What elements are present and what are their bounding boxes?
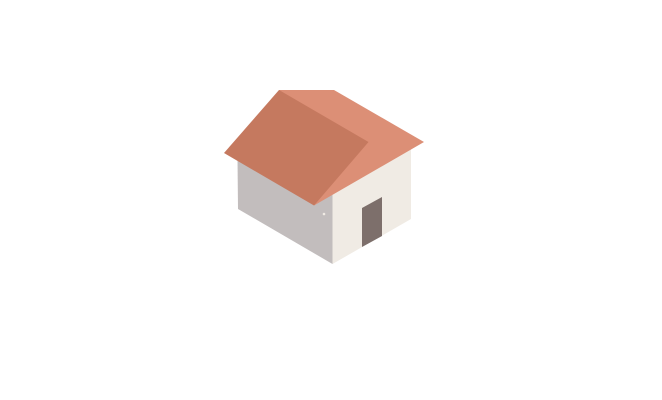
left wall [238,158,332,264]
icon: isometric house [224,90,424,264]
right wall [332,145,411,264]
roof left slope [224,90,368,206]
door [362,197,382,247]
door knob [323,213,325,215]
roof right slope [279,90,424,206]
